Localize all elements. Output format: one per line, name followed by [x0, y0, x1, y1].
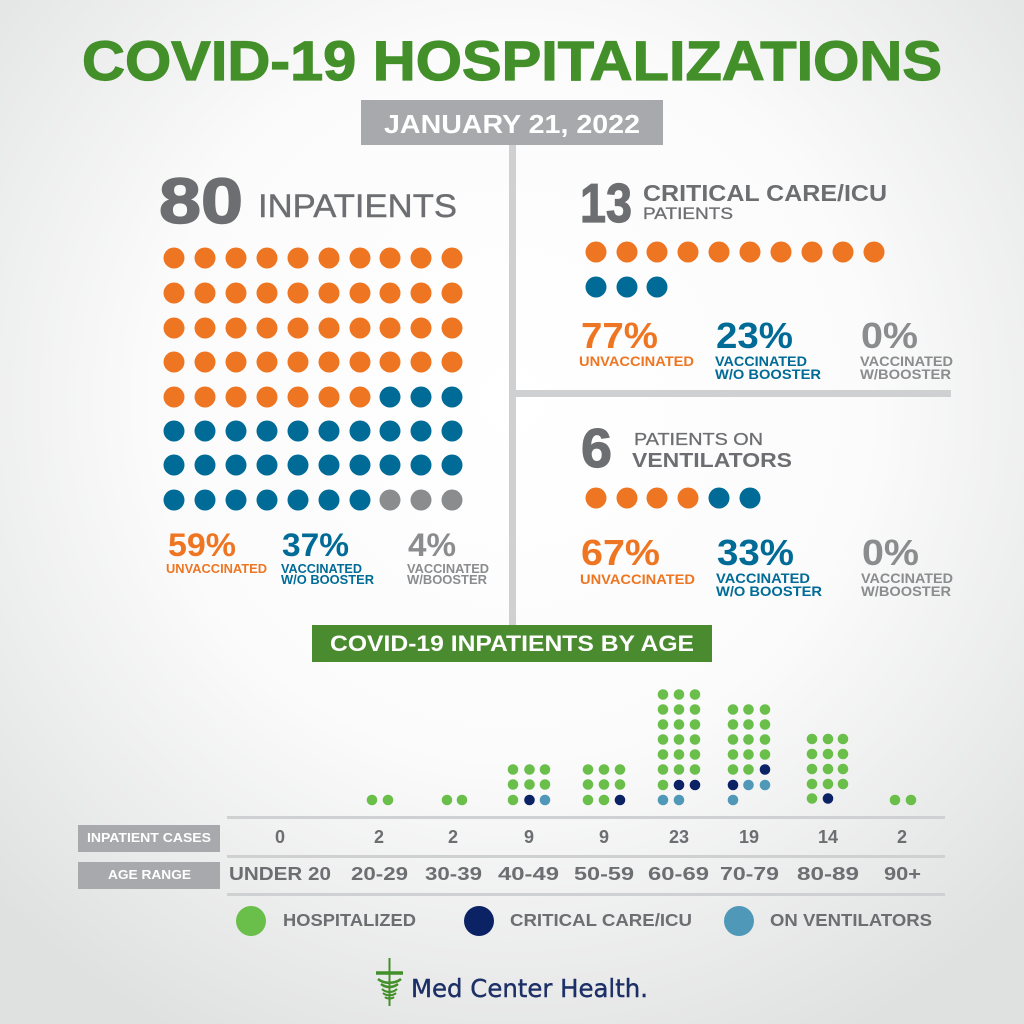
row values: age ranges	[229, 864, 921, 884]
stat: 77% unvaccinated: UNVACCINATED	[579, 353, 694, 369]
row values: age ranges: 90+	[884, 864, 921, 884]
row values: age ranges: 50-59	[574, 864, 634, 884]
legend	[236, 906, 932, 936]
stat: 0% vaccinated with booster: W/BOOSTER	[861, 583, 951, 599]
row values: inpatient cases: 2	[374, 827, 384, 847]
stat: 23% vaccinated without booster	[715, 315, 821, 382]
table: cases by age range	[78, 816, 945, 896]
stat: 0% vaccinated with booster: VACCINATED	[860, 353, 953, 369]
stat: 59% unvaccinated: UNVACCINATED	[166, 562, 267, 576]
row values: age ranges: 70-79	[720, 864, 779, 884]
stat: 67% unvaccinated	[580, 532, 695, 587]
row values: age ranges: 20-29	[351, 864, 408, 884]
row label: age range: AGE RANGE	[108, 867, 191, 882]
stat: 77% unvaccinated	[579, 315, 694, 369]
row label: inpatient cases: INPATIENT CASES	[87, 830, 211, 845]
date banner	[361, 100, 663, 145]
stat: 33% vaccinated without booster: 33%	[717, 532, 794, 573]
stat: 59% unvaccinated: 59%	[168, 527, 236, 563]
stat: 33% vaccinated without booster: VACCINATED	[716, 570, 810, 586]
date banner: JANUARY 21, 2022	[384, 109, 640, 139]
critical care heading: 13	[580, 172, 632, 234]
stat: 77% unvaccinated: 77%	[581, 315, 658, 356]
row values: age ranges: 60-69	[648, 864, 709, 884]
stat: 0% vaccinated with booster: 0%	[861, 315, 918, 356]
ventilators heading	[581, 417, 792, 479]
row values: age ranges: 40-49	[498, 864, 559, 884]
stat: 0% vaccinated with booster	[860, 315, 953, 382]
stat: 33% vaccinated without booster: W/O BOOSTER	[716, 583, 822, 599]
row values: age ranges: 80-89	[797, 864, 859, 884]
ventilators heading: PATIENTS ON	[634, 429, 763, 449]
stat: 23% vaccinated without booster: W/O BOOSTER	[715, 366, 821, 382]
critical care heading: PATIENTS	[643, 204, 733, 223]
stat: 37% vaccinated without booster	[281, 527, 374, 587]
age section heading: COVID-19 INPATIENTS BY AGE	[330, 631, 694, 656]
critical care heading: CRITICAL CARE/ICU	[643, 180, 887, 206]
row values: age ranges: UNDER 20	[229, 864, 331, 884]
icon: caduceus	[376, 958, 403, 1006]
row values: inpatient cases: 2	[448, 827, 458, 847]
critical care heading	[580, 172, 887, 234]
stat: 23% vaccinated without booster: VACCINATED	[715, 353, 807, 369]
row values: inpatient cases: 23	[669, 827, 689, 847]
row values: inpatient cases: 14	[818, 827, 838, 847]
inpatients heading: 80	[159, 165, 243, 237]
inpatients heading	[159, 165, 457, 237]
panel: critical care	[579, 172, 953, 382]
stat: 4% vaccinated with booster: W/BOOSTER	[407, 573, 487, 587]
dot chart: inpatients by age	[367, 689, 916, 805]
ventilators heading: 6	[581, 417, 612, 479]
row values: inpatient cases: 19	[739, 827, 759, 847]
panel: inpatients	[159, 165, 489, 587]
stat: 0% vaccinated with booster	[861, 532, 953, 599]
dots: 6 ventilator patients	[586, 488, 760, 508]
stat: 37% vaccinated without booster: W/O BOOSTER	[281, 573, 374, 587]
title: COVID-19 HOSPITALIZATIONS	[82, 29, 942, 92]
stat: 59% unvaccinated	[166, 527, 267, 576]
inpatients heading: INPATIENTS	[258, 188, 457, 224]
stat: 23% vaccinated without booster: 23%	[716, 315, 793, 356]
stat: 4% vaccinated with booster	[407, 527, 489, 587]
legend: HOSPITALIZED	[283, 910, 416, 930]
row values: inpatient cases: 9	[599, 827, 609, 847]
row values: inpatient cases	[275, 827, 907, 847]
stat: 0% vaccinated with booster: W/BOOSTER	[860, 366, 951, 382]
legend: CRITICAL CARE/ICU	[510, 910, 692, 930]
dots: 13 critical care patients	[586, 242, 884, 298]
logo: Med Center Health	[376, 958, 648, 1006]
dot grid: 80 inpatients	[164, 248, 462, 510]
stat: 0% vaccinated with booster: VACCINATED	[861, 570, 953, 586]
row values: inpatient cases: 2	[897, 827, 907, 847]
age section heading	[312, 625, 712, 662]
row label: age range	[78, 862, 220, 889]
stat: 67% unvaccinated: 67%	[581, 532, 660, 573]
row values: inpatient cases: 0	[275, 827, 285, 847]
logo wordmark: Med Center Health.	[411, 974, 648, 1003]
stat: 67% unvaccinated: UNVACCINATED	[580, 571, 695, 587]
row label: inpatient cases	[78, 825, 220, 852]
panel: ventilators	[580, 417, 953, 599]
ventilators heading: VENTILATORS	[632, 450, 792, 472]
stat: 33% vaccinated without booster	[716, 532, 822, 599]
row values: inpatient cases: 9	[524, 827, 534, 847]
stat: 37% vaccinated without booster: VACCINATED	[281, 562, 362, 576]
stat: 37% vaccinated without booster: 37%	[282, 527, 349, 563]
stat: 4% vaccinated with booster: VACCINATED	[407, 562, 489, 576]
row values: age ranges: 30-39	[425, 864, 482, 884]
legend: ON VENTILATORS	[770, 910, 932, 930]
stat: 0% vaccinated with booster: 0%	[862, 532, 919, 573]
stat: 4% vaccinated with booster: 4%	[408, 527, 456, 563]
